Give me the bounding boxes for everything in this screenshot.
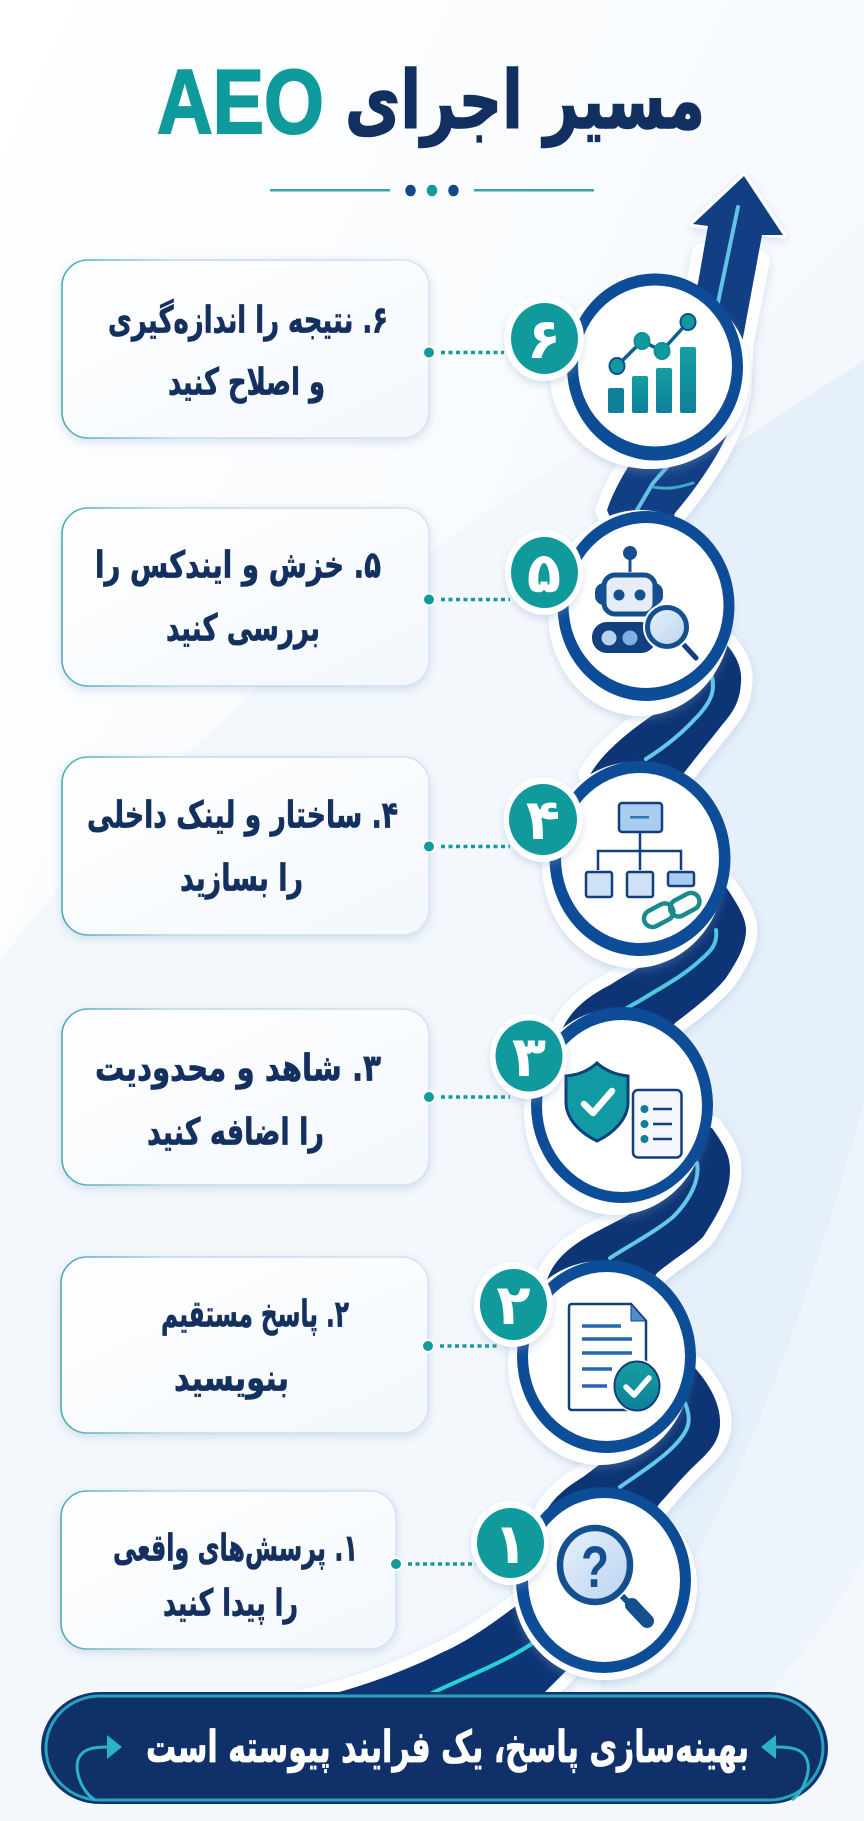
card 3: را اضافه کنید xyxy=(147,1110,324,1154)
connector 6 xyxy=(422,346,504,360)
step 3 xyxy=(62,1007,713,1215)
road white border xyxy=(300,176,783,1702)
card 1: ۱. پرسش‌های واقعی xyxy=(113,1526,358,1570)
card 6: و اصلاح کنید xyxy=(168,360,325,404)
title divider xyxy=(270,185,594,196)
bottom banner xyxy=(42,1693,827,1803)
arrow: left loop xyxy=(77,1735,122,1800)
circle 4 xyxy=(542,761,730,968)
card 5: ۵. خزش و ایندکس را xyxy=(95,544,381,586)
connector 5 xyxy=(422,592,510,606)
badge 3 xyxy=(490,1014,567,1099)
connector 3 xyxy=(422,1090,510,1104)
badge 5 xyxy=(505,530,583,615)
badge 4 xyxy=(504,777,582,862)
title xyxy=(157,52,705,153)
icon: question magnifier: ? xyxy=(581,1535,609,1600)
icon: question magnifier xyxy=(560,1528,647,1621)
badge 1 xyxy=(471,1501,549,1585)
arrow: right loop xyxy=(761,1735,808,1800)
card 2 xyxy=(61,1257,428,1433)
connector 4 xyxy=(422,840,510,854)
icon: shield and checklist xyxy=(566,1063,682,1158)
badge 1: ۱ xyxy=(493,1512,528,1577)
badge 6 xyxy=(504,296,584,381)
step 5 xyxy=(62,508,734,716)
card 3 xyxy=(62,1009,429,1185)
circle 6 xyxy=(550,274,750,469)
card 1: را پیدا کنید xyxy=(163,1582,298,1624)
card 5: بررسی کنید xyxy=(166,606,320,650)
road light centre line xyxy=(430,207,738,1694)
connector 2 xyxy=(421,1339,500,1353)
card 3: ۳. شاهد و محدودیت xyxy=(95,1046,381,1090)
icon: site structure with link xyxy=(586,803,702,930)
badge 2: ۲ xyxy=(496,1273,531,1338)
card 1 xyxy=(61,1491,396,1649)
step 1 xyxy=(61,1487,697,1680)
card 6: ۶. نتیجه را اندازه‌گیری xyxy=(108,298,388,342)
icon: robot with magnifier xyxy=(592,546,696,658)
badge 5: ۵ xyxy=(527,541,561,606)
card 5 xyxy=(62,508,429,686)
step 4 xyxy=(62,757,730,968)
card 2: بنویسید xyxy=(174,1356,289,1400)
badge 2 xyxy=(474,1262,553,1347)
title: Persian words: مسیر اجرای xyxy=(345,54,705,148)
circle 2 xyxy=(508,1260,696,1465)
step 6 xyxy=(62,260,750,469)
icon: document with check xyxy=(569,1304,662,1413)
circle 5 xyxy=(548,510,734,716)
winding road arrow xyxy=(300,176,783,1702)
card 4: ۴. ساختار و لینک داخلی xyxy=(87,794,398,836)
badge 6: ۶ xyxy=(527,307,561,372)
road dark body xyxy=(300,176,783,1702)
circle 1 xyxy=(513,1487,697,1680)
badge 4: ۴ xyxy=(526,788,560,853)
card 4: را بسازید xyxy=(180,856,303,900)
icon: chart xyxy=(608,314,696,413)
card 6 xyxy=(62,260,429,438)
card 4 xyxy=(62,757,429,935)
title: AEO: AEO xyxy=(157,52,324,153)
card 2: ۲. پاسخ مستقیم xyxy=(161,1292,349,1336)
connector 1 xyxy=(389,1557,476,1571)
circle 3 xyxy=(524,1007,713,1215)
badge 3: ۳ xyxy=(512,1025,546,1090)
step 2 xyxy=(61,1257,696,1465)
